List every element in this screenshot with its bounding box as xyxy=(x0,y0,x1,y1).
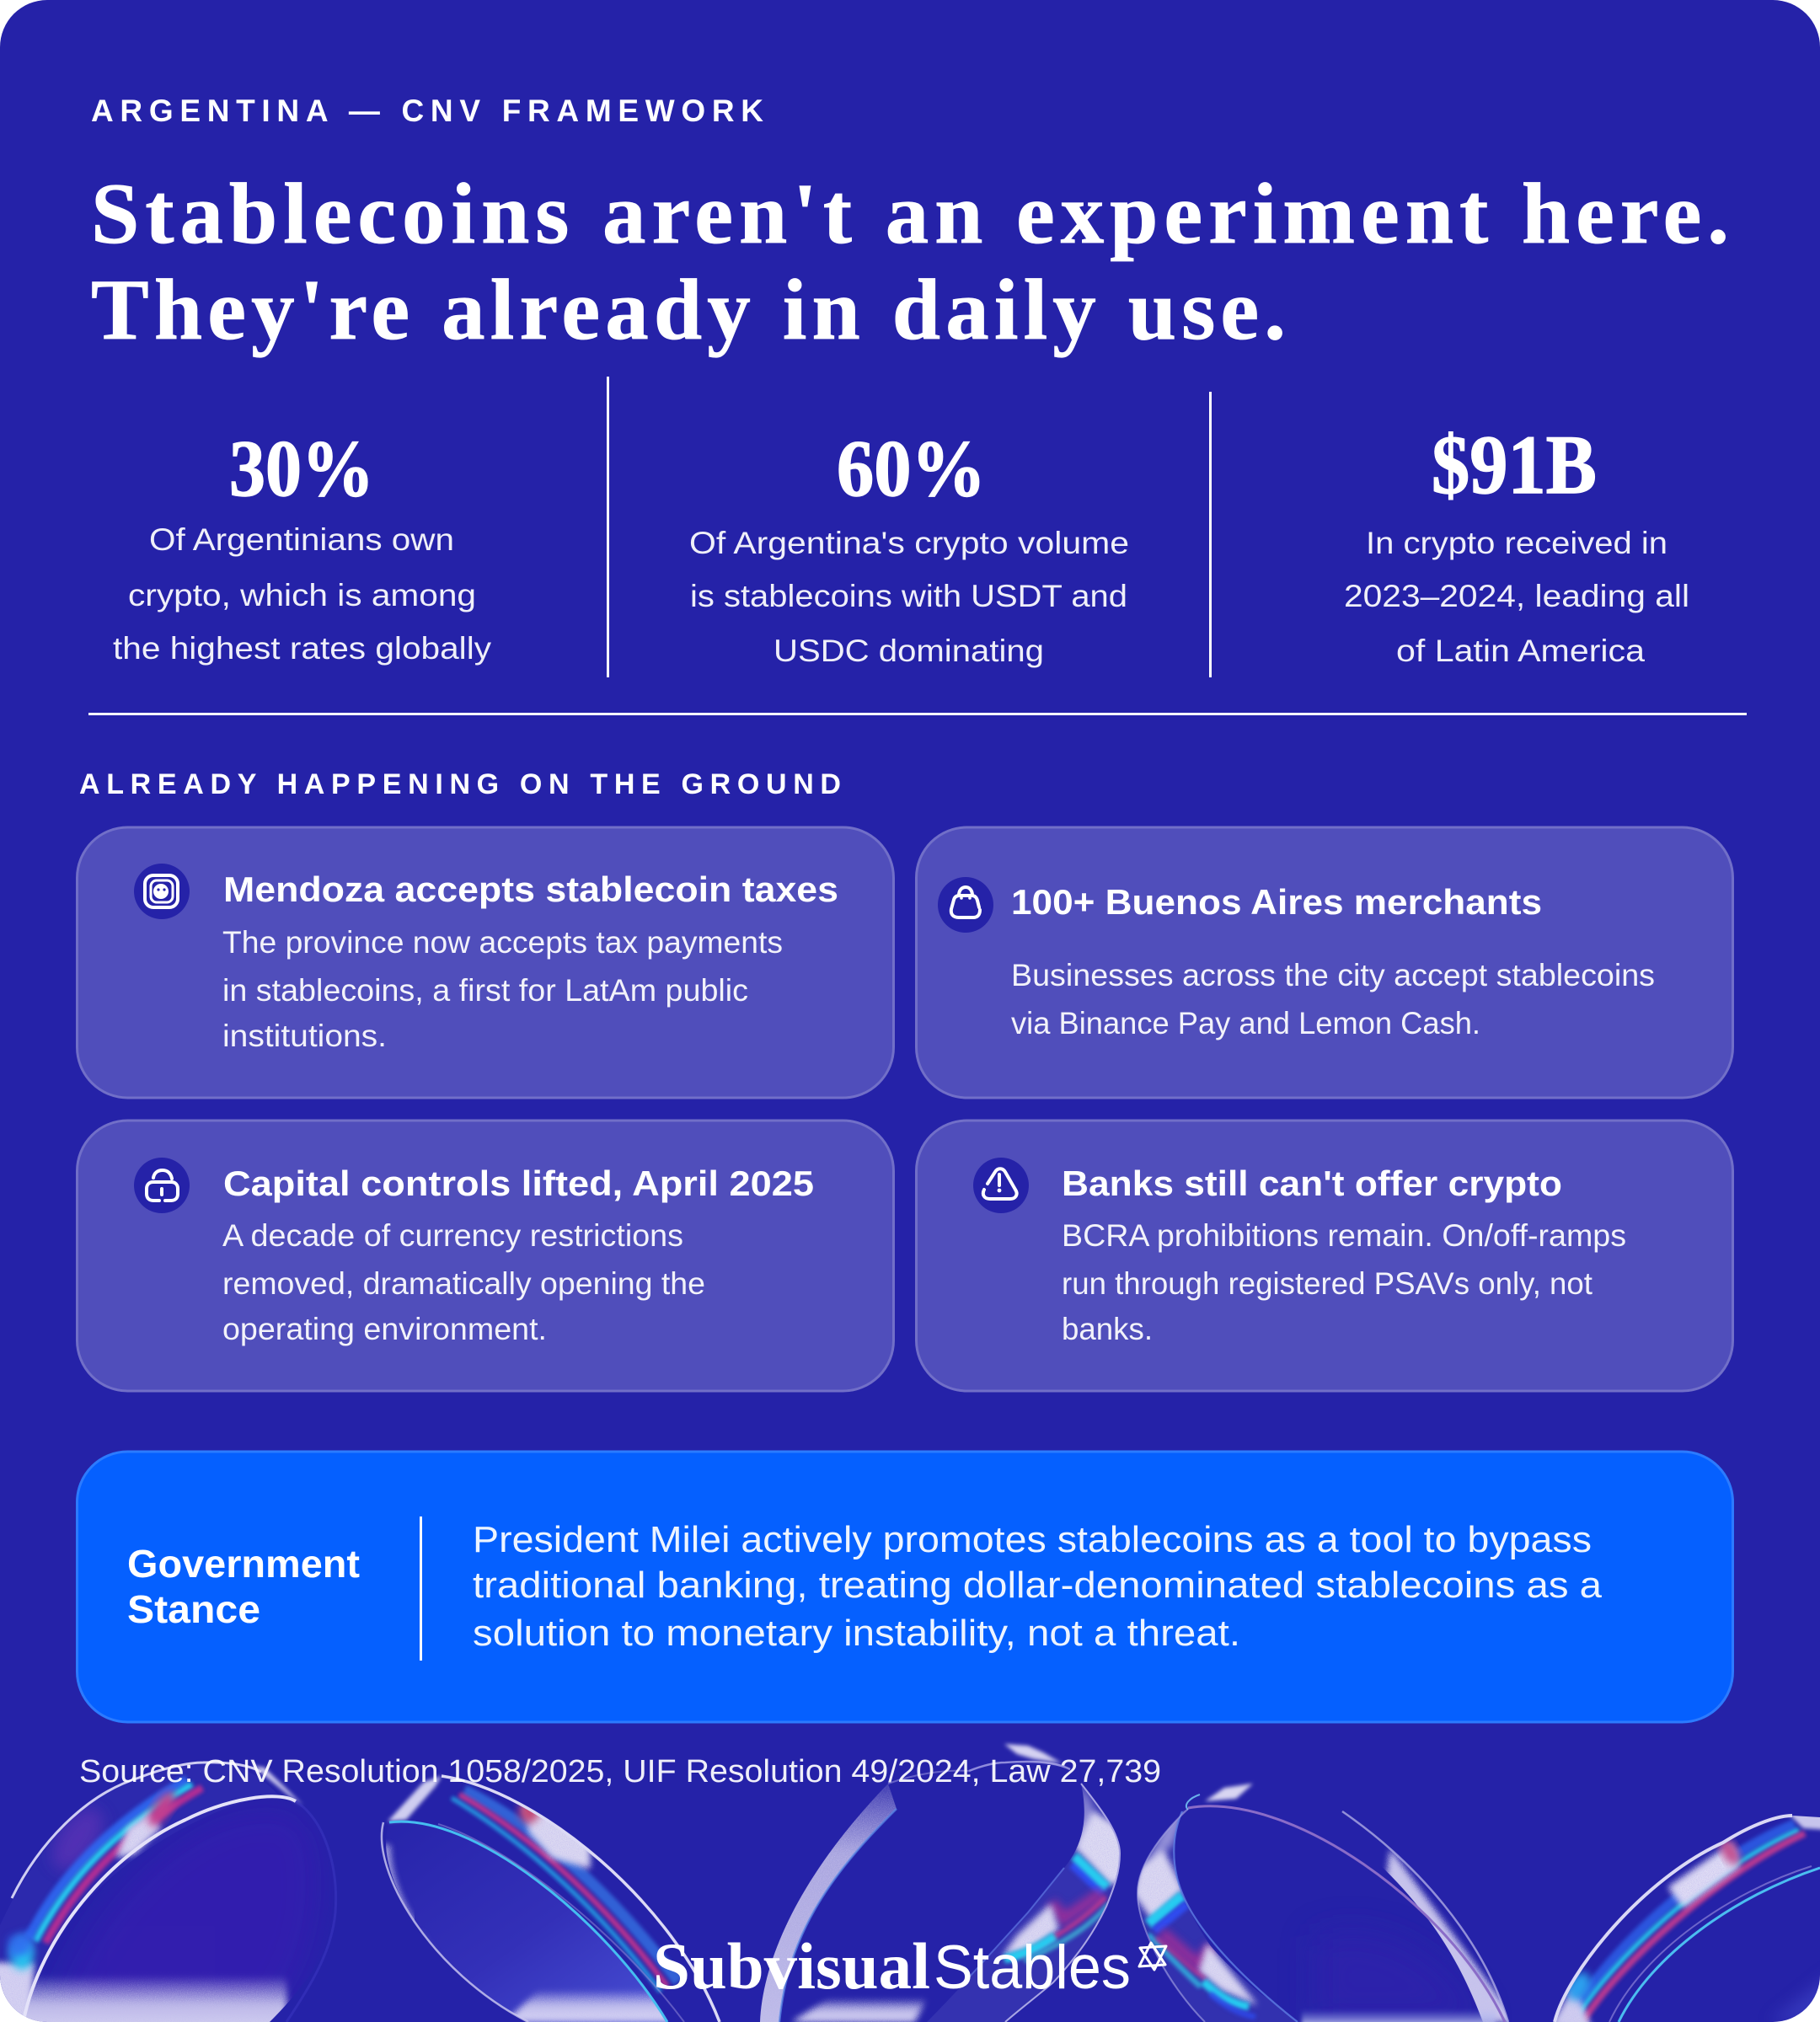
stat: 30%: crypto, which is among xyxy=(128,578,476,612)
stat: 30%: 30% xyxy=(229,424,374,513)
stat: 30%: the highest rates globally xyxy=(113,631,492,666)
label: Stance xyxy=(127,1587,260,1631)
stat: $91B: In crypto received in xyxy=(1366,526,1667,560)
main title: They're already in daily use. xyxy=(91,262,1286,358)
card text: BCRA prohibitions remain. On/off-ramps xyxy=(1062,1218,1626,1253)
stat: $91B xyxy=(1344,418,1689,668)
label xyxy=(127,1542,360,1631)
decorative glass coins xyxy=(0,1744,1820,2022)
stats row xyxy=(113,377,1689,677)
stat: 60% xyxy=(689,424,1129,668)
card text: operating environment. xyxy=(222,1312,547,1346)
label: Government xyxy=(127,1542,360,1586)
coin 5 xyxy=(1550,1811,1820,2022)
panel: Mendoza xyxy=(78,827,893,1098)
logo xyxy=(653,1929,1166,2003)
card text xyxy=(222,1163,814,1346)
card text: 100+ Buenos Aires merchants xyxy=(1011,882,1542,922)
icon: warning triangle xyxy=(973,1158,1029,1213)
coin 4 xyxy=(1129,1784,1517,2022)
stat: $91B: of Latin America xyxy=(1396,634,1645,668)
card text: Banks still can't offer crypto xyxy=(1062,1163,1562,1203)
stat: 60%: is stablecoins with USDT and xyxy=(690,579,1127,613)
stat: 30% xyxy=(113,424,492,666)
main title: Stablecoins aren't an experiment here. xyxy=(91,166,1729,262)
panel: Banks xyxy=(917,1121,1732,1391)
section heading: ALREADY HAPPENING ON THE GROUND xyxy=(79,768,841,800)
coin 1 xyxy=(0,1761,336,2022)
coin 2 xyxy=(362,1776,720,2022)
source note: Source: CNV Resolution 1058/2025, UIF Resolution 49/2024, Law 27,739 xyxy=(79,1754,1161,1789)
icon: coin face xyxy=(134,864,190,919)
stat: 60%: 60% xyxy=(837,424,986,513)
stat: $91B: 2023–2024, leading all xyxy=(1344,579,1689,613)
card text: institutions. xyxy=(222,1019,387,1053)
icon: shopping bag xyxy=(938,877,993,933)
statement: traditional banking, treating dollar-denominated stablecoins as a xyxy=(473,1565,1603,1606)
card text: banks. xyxy=(1062,1312,1153,1346)
card text: The province now accepts tax payments xyxy=(222,925,783,960)
card text: run through registered PSAVs only, not xyxy=(1062,1266,1593,1301)
panel: Government Stance xyxy=(78,1452,1732,1722)
card text: via Binance Pay and Lemon Cash. xyxy=(1011,1006,1480,1040)
main title xyxy=(91,166,1729,358)
icon: knot star xyxy=(1139,1943,1166,1970)
panel: Buenos Aires merchants xyxy=(917,827,1732,1098)
card text xyxy=(1011,882,1655,1040)
eyebrow: ARGENTINA — CNV FRAMEWORK xyxy=(91,94,763,128)
card text: Mendoza accepts stablecoin taxes xyxy=(223,869,838,909)
card text: Capital controls lifted, April 2025 xyxy=(223,1163,814,1203)
panel: Capital controls xyxy=(78,1121,893,1391)
stat: $91B: $91B xyxy=(1432,418,1597,511)
stat divider xyxy=(1209,392,1212,677)
card text xyxy=(1062,1163,1626,1346)
logo: Subvisual xyxy=(653,1929,930,2003)
coin 3 xyxy=(750,1744,1129,2022)
statement: solution to monetary instability, not a threat. xyxy=(473,1613,1240,1654)
statement: President Milei actively promotes stablecoins as a tool to bypass xyxy=(473,1519,1592,1560)
card text: in stablecoins, a first for LatAm public xyxy=(222,973,748,1008)
stat: 60%: USDC dominating xyxy=(774,634,1044,668)
logo: Stables xyxy=(934,1934,1131,2002)
card text xyxy=(222,869,838,1053)
stat divider xyxy=(607,377,609,677)
card text: Businesses across the city accept stablecoins xyxy=(1011,958,1655,992)
statement xyxy=(473,1519,1603,1654)
stat: 30%: Of Argentinians own xyxy=(149,522,454,557)
card text: A decade of currency restrictions xyxy=(222,1218,683,1253)
icon: open lock xyxy=(134,1158,190,1213)
stat: 60%: Of Argentina's crypto volume xyxy=(689,526,1129,560)
card text: removed, dramatically opening the xyxy=(222,1266,705,1301)
